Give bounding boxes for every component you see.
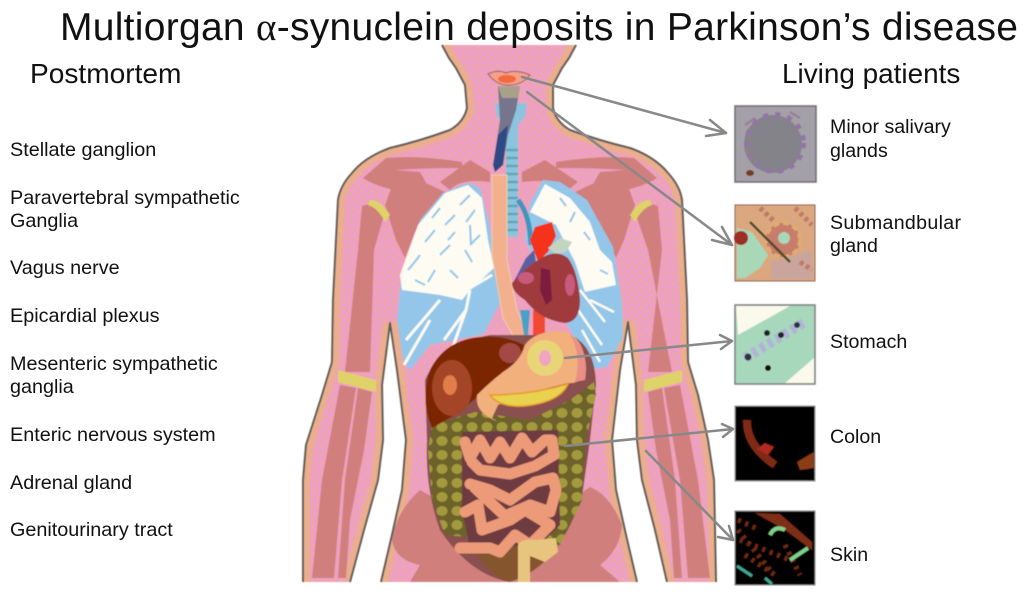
throat bbox=[493, 86, 520, 172]
living patient labels: Colon bbox=[830, 426, 881, 448]
bones: shoulders and arms bbox=[312, 157, 710, 578]
living patient labels: glands bbox=[830, 140, 888, 162]
title: Multiorgan α-synuclein deposits in Parkinson’s disease bbox=[60, 6, 1018, 49]
postmortem list: Adrenal gland bbox=[10, 472, 132, 494]
body outline bbox=[303, 45, 716, 582]
esophagus bbox=[492, 175, 532, 352]
micrograph: stomach bbox=[735, 305, 815, 384]
micrograph: skin bbox=[735, 511, 815, 585]
arrows bbox=[522, 77, 733, 540]
living patient labels: Stomach bbox=[830, 331, 907, 353]
postmortem list: Ganglia bbox=[10, 210, 78, 232]
micrograph: submandibular gland bbox=[734, 205, 815, 281]
joints bbox=[338, 200, 682, 392]
rectum bbox=[518, 538, 558, 582]
body illustration bbox=[303, 45, 716, 582]
pelvis bbox=[392, 487, 622, 582]
postmortem list: Mesenteric sympathetic bbox=[10, 353, 218, 375]
micrograph: minor salivary glands bbox=[735, 106, 816, 182]
right lung airways bbox=[530, 184, 616, 292]
small intestine bbox=[460, 438, 556, 552]
liver bbox=[425, 337, 524, 428]
living patient labels: Submandbular bbox=[830, 212, 961, 234]
heart bbox=[512, 222, 580, 323]
trachea bbox=[495, 103, 527, 237]
arrow: skin bbox=[646, 451, 733, 540]
living patient labels: Skin bbox=[830, 544, 868, 566]
postmortem list: Epicardial plexus bbox=[10, 305, 160, 327]
body fill bbox=[303, 45, 716, 582]
living patient labels: Minor salivary bbox=[830, 116, 951, 138]
postmortem list bbox=[10, 139, 240, 541]
mouth bbox=[488, 71, 530, 85]
pancreas bbox=[490, 384, 568, 406]
airway stripes bbox=[506, 150, 518, 230]
small intestine bed bbox=[462, 430, 560, 548]
living patient labels bbox=[830, 116, 961, 566]
descending aorta bbox=[533, 310, 545, 340]
stomach bbox=[477, 331, 585, 422]
living patient labels: gland bbox=[830, 235, 878, 257]
arrow: colon bbox=[565, 424, 733, 446]
postmortem list: Enteric nervous system bbox=[10, 424, 216, 446]
heading: postmortem: Postmortem bbox=[30, 58, 181, 89]
postmortem list: Vagus nerve bbox=[10, 257, 120, 279]
postmortem list: Genitourinary tract bbox=[10, 519, 173, 541]
abdominal cavity bbox=[425, 335, 596, 582]
postmortem list: Stellate ganglion bbox=[10, 139, 156, 161]
postmortem list: Paravertebral sympathetic bbox=[10, 187, 240, 209]
sandy skin shading bbox=[303, 45, 716, 582]
arrow: stomach bbox=[565, 335, 732, 358]
pulmonary vessel bbox=[518, 200, 531, 245]
arrow: submandibular gland bbox=[527, 92, 732, 245]
postmortem list: ganglia bbox=[10, 376, 74, 398]
heading: living patients: Living patients bbox=[782, 58, 960, 89]
lungs bbox=[397, 180, 623, 370]
micrographs bbox=[734, 106, 816, 585]
left lung airways bbox=[400, 185, 494, 300]
colon bbox=[428, 382, 596, 545]
arrow: minor salivary glands bbox=[522, 77, 726, 136]
micrograph: colon bbox=[735, 406, 815, 481]
